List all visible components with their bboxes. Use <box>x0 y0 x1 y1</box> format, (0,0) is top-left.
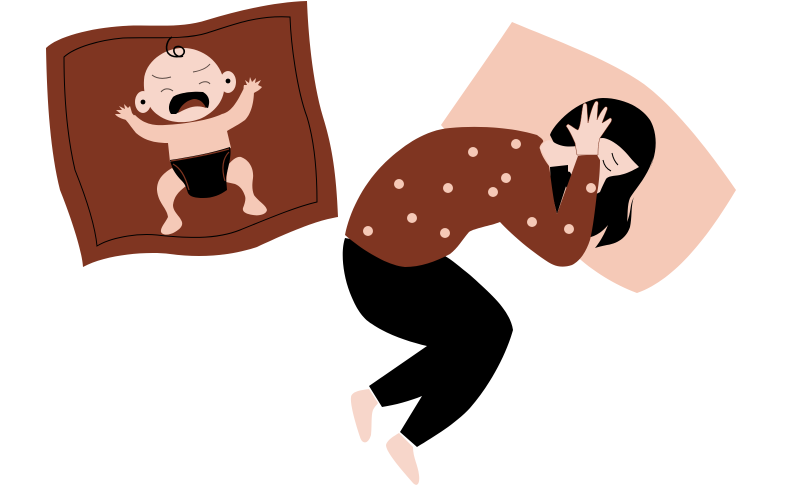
sweater dots <box>363 139 596 238</box>
hair highlight <box>627 158 653 222</box>
diaper trim <box>171 149 229 190</box>
baby ears <box>135 71 236 113</box>
pillow <box>441 22 736 293</box>
baby hair curl <box>167 37 184 57</box>
baby legs <box>157 157 267 235</box>
blanket <box>46 1 338 267</box>
hair behind arm <box>550 165 568 214</box>
face <box>540 138 639 200</box>
baby hands <box>115 77 262 122</box>
hand <box>566 101 612 155</box>
baby head <box>144 48 224 122</box>
feet <box>351 389 419 485</box>
trousers <box>343 238 513 447</box>
sweater <box>345 127 600 267</box>
baby <box>115 37 267 235</box>
eye <box>603 153 618 171</box>
baby body and arms <box>124 88 254 162</box>
baby diaper <box>170 147 231 198</box>
baby face <box>152 64 210 92</box>
woman <box>343 98 656 485</box>
baby mouth <box>169 92 209 114</box>
hair <box>550 98 656 248</box>
